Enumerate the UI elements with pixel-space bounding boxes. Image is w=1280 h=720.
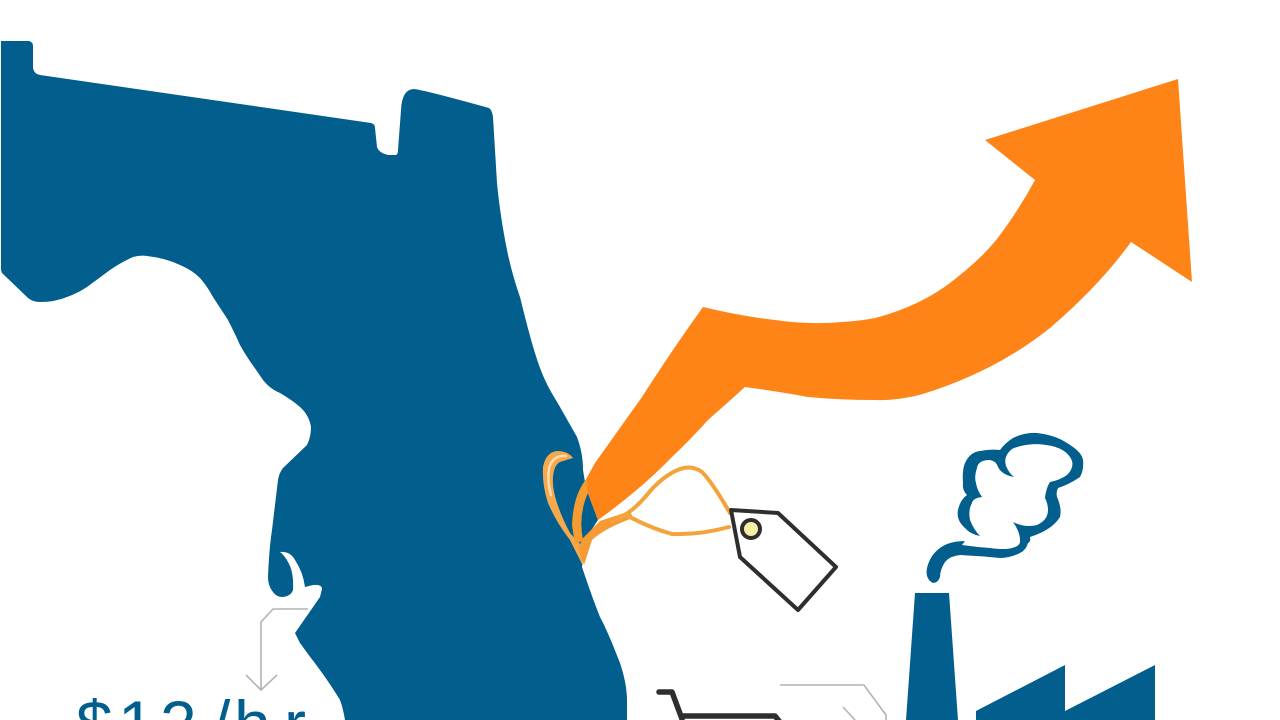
smoke plume: [927, 433, 1083, 583]
icon: price tag: [731, 510, 836, 610]
ribbon: curl highlight: [548, 456, 566, 495]
icon: factory with smoke: [906, 433, 1155, 720]
ribbon: upper loop: [612, 468, 730, 521]
ribbons: orange strands linking map and price tag: [543, 451, 730, 566]
ribbon: lower strand: [628, 516, 729, 534]
ribbon: stem and tip: [578, 511, 633, 565]
arrow: grey leader to wage figure: [246, 609, 308, 690]
icon: shopping cart: [659, 692, 779, 720]
arrow: rising orange arrow: [580, 79, 1192, 520]
ribbon: left curl: [543, 451, 583, 566]
ribbon: centre strand: [572, 478, 588, 545]
chimney: [906, 593, 958, 720]
factory roof: [976, 665, 1155, 720]
map: Florida silhouette: [1, 41, 627, 720]
arrow: grey leader to cart: [780, 685, 886, 720]
